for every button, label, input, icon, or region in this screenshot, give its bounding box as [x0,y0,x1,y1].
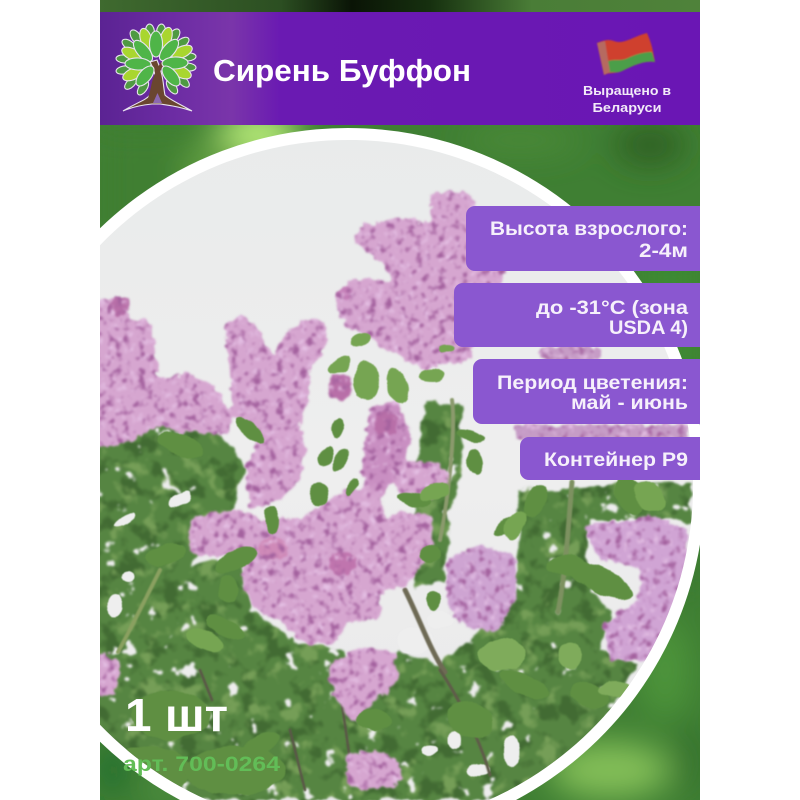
spec panel: height [466,206,700,271]
spec panel: container: Контейнер Р9 [544,450,688,471]
cluster: horizontal [186,510,262,556]
spec panel: container [520,437,700,480]
spec panel: hardiness [454,283,700,347]
flag of Belarus [597,33,655,75]
caption: grown in Belarus [583,84,671,115]
spec panel: hardiness: до -31°C (зона [536,298,688,319]
cluster: left lower [91,653,119,697]
main green leaves [125,31,188,89]
mid green leaves [110,412,652,794]
cluster: right upper [583,515,687,660]
cluster: centre right [447,545,517,632]
cluster: second left [155,372,232,436]
lime leaves [120,26,194,84]
cluster: main big [243,488,400,644]
cluster: left edge [88,295,162,450]
purple header band [100,12,700,125]
quantity label: 1 шт [125,689,228,741]
near lilac clusters [88,192,687,790]
foliage masses [92,402,692,800]
bright leaves [183,331,671,698]
cluster: Y-shaped [226,316,327,432]
title: Сирень Буффон [213,53,471,88]
spec panel: height: 2-4м [639,241,688,262]
white circle frame [100,128,700,800]
foreground leaves [110,331,671,794]
cluster: top large [333,192,510,370]
stems [118,400,572,790]
top strip [100,0,700,12]
outer dark leaves [115,24,196,97]
caption: grown in Belarus: Выращено в [583,84,671,98]
photo: lilac bush [88,130,700,800]
sky [100,130,700,800]
sky gaps in foliage [107,488,520,776]
cluster: upper mid [362,402,412,495]
tree trunk and base [123,60,192,111]
far lilacs [512,347,689,441]
logo: tree [115,24,196,111]
blurred green background [100,125,700,800]
cluster: lower [327,650,400,725]
spec panel: hardiness: USDA 4) [609,318,688,339]
cluster: under Y [246,428,305,510]
spec panel: bloom period: Период цветения: [497,373,688,394]
spec panel: bloom period: май - июнь [571,393,688,414]
cluster: mid right [392,462,450,500]
caption: grown in Belarus: Беларуси [592,101,662,115]
spec panel: height: Высота взрослого: [490,219,688,240]
small bud clusters [110,286,397,575]
spec panel: bloom period [473,359,700,424]
cluster: bottom [345,750,402,790]
article number: арт. 700-0264 [123,753,280,776]
